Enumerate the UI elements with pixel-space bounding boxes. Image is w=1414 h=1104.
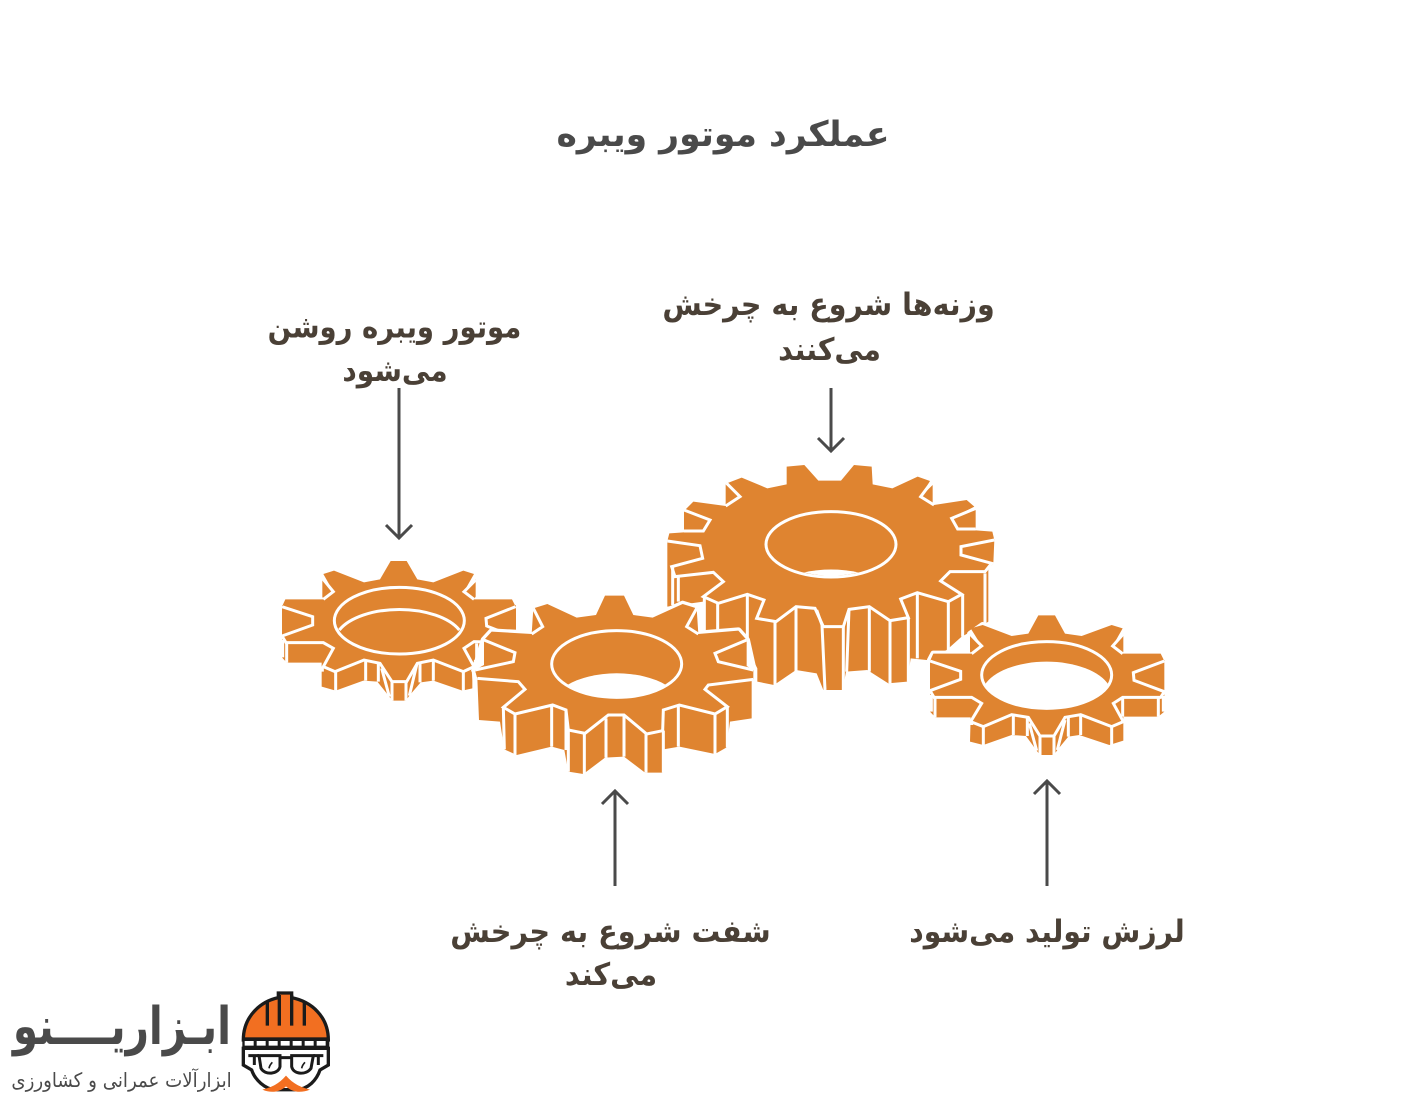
label: motor turns on: می‌شود <box>342 353 448 388</box>
label: shaft starts rotating: می‌کند <box>565 957 657 993</box>
icon: helmet mascot <box>243 993 328 1092</box>
title: عملکرد موتور ویبره <box>556 115 890 155</box>
hole <box>552 631 682 697</box>
hole <box>766 512 896 577</box>
logo: wordmark: ابـزاریــــنو <box>11 996 231 1057</box>
label: weights start rotating: وزنه‌ها شروع به چرخش <box>662 287 995 323</box>
label: weights start rotating: می‌کنند <box>778 332 881 368</box>
logo: tagline: ابزارآلات عمرانی و کشاورزی <box>11 1067 232 1092</box>
label: vibration is produced: لرزش تولید می‌شود <box>909 913 1185 949</box>
gear: weights (large gear) <box>667 465 994 690</box>
hole <box>982 642 1112 708</box>
label: shaft starts rotating: شفت شروع به چرخش <box>450 914 771 950</box>
arrow: to weights gear <box>818 388 844 451</box>
label: shaft starts rotating <box>450 914 771 993</box>
gear: shaft (middle gear) <box>475 596 753 774</box>
arrow: to vibration gear <box>1034 781 1060 886</box>
label: motor turns on <box>268 309 521 388</box>
label: weights start rotating <box>662 287 995 368</box>
arrow: to motor gear <box>386 388 412 538</box>
arrow: to shaft gear <box>602 791 628 886</box>
label: motor turns on: موتور ویبره روشن <box>268 309 521 345</box>
hole <box>334 587 464 654</box>
gear: motor (small left gear) <box>282 561 516 701</box>
gear: vibration (right gear) <box>930 615 1164 755</box>
